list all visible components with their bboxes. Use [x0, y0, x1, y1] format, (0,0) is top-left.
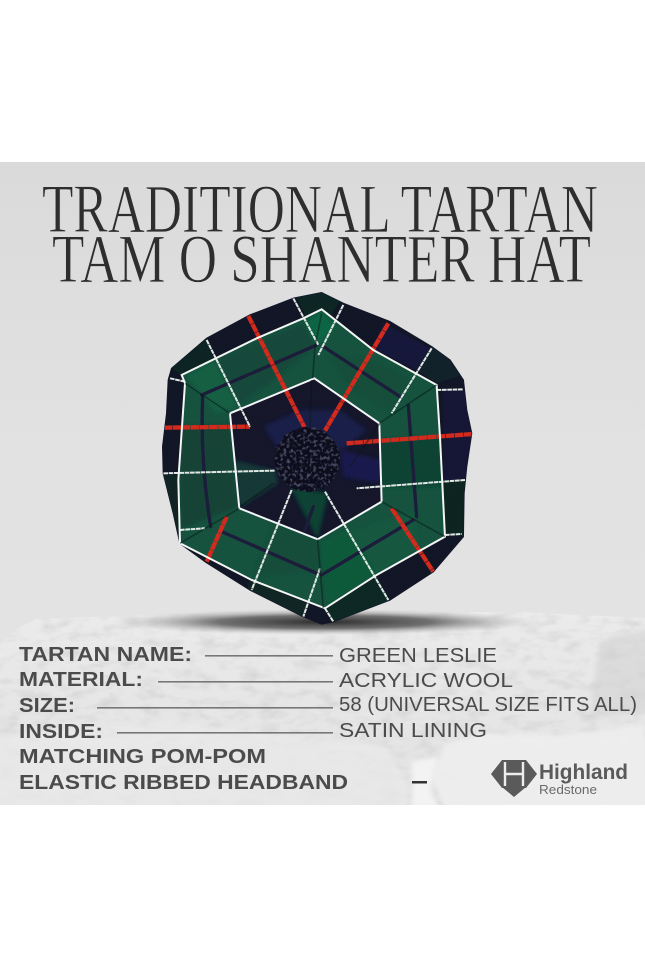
row: size: 58 (UNIVERSAL SIZE FITS ALL)	[339, 693, 637, 716]
pom-pom	[275, 427, 340, 492]
row: tartan name	[19, 643, 497, 667]
hat green band	[178, 309, 445, 608]
row: size: SIZE:	[19, 694, 75, 717]
white outline of inner hexagon	[230, 378, 382, 539]
logo mark	[491, 760, 537, 797]
feature: elastic ribbed headband: ELASTIC RIBBED HEADBAND	[19, 771, 348, 794]
row: tartan name: GREEN LESLIE	[339, 644, 497, 667]
background panel	[0, 162, 645, 805]
red tartan stripes	[163, 316, 473, 572]
row: material: MATERIAL:	[19, 668, 143, 691]
row: material: ACRYLIC WOOL	[339, 669, 513, 692]
tartan hat	[160, 290, 473, 624]
panel fold shadows	[180, 313, 445, 608]
logo wordmark: Highland	[539, 761, 628, 784]
inner hexagon colour panels	[233, 410, 380, 539]
title	[42, 171, 598, 297]
green band darker blocks	[178, 312, 445, 603]
hat inner hexagon	[230, 378, 382, 539]
rock pedestal	[0, 612, 645, 812]
row: tartan name: TARTAN NAME:	[19, 643, 192, 666]
feature: matching pom-pom: MATCHING POM-POM	[19, 745, 266, 768]
row: inside: INSIDE:	[19, 720, 103, 743]
logo: Highland Redstone	[491, 760, 628, 797]
row: material	[19, 668, 513, 692]
dark tartan lines	[202, 345, 417, 575]
infographic canvas	[0, 162, 645, 805]
twill texture	[163, 293, 472, 624]
outer band colour blocks	[160, 290, 473, 623]
row: inside	[19, 719, 487, 743]
hat shadow	[110, 609, 540, 635]
white outline of green band	[178, 309, 445, 608]
spec list	[19, 643, 637, 794]
logo subtitle: Redstone	[539, 782, 597, 797]
hat outer band	[163, 293, 472, 624]
row: inside: SATIN LINING	[339, 719, 487, 742]
thin light tartan stripes	[163, 298, 465, 622]
row: size	[19, 693, 637, 717]
